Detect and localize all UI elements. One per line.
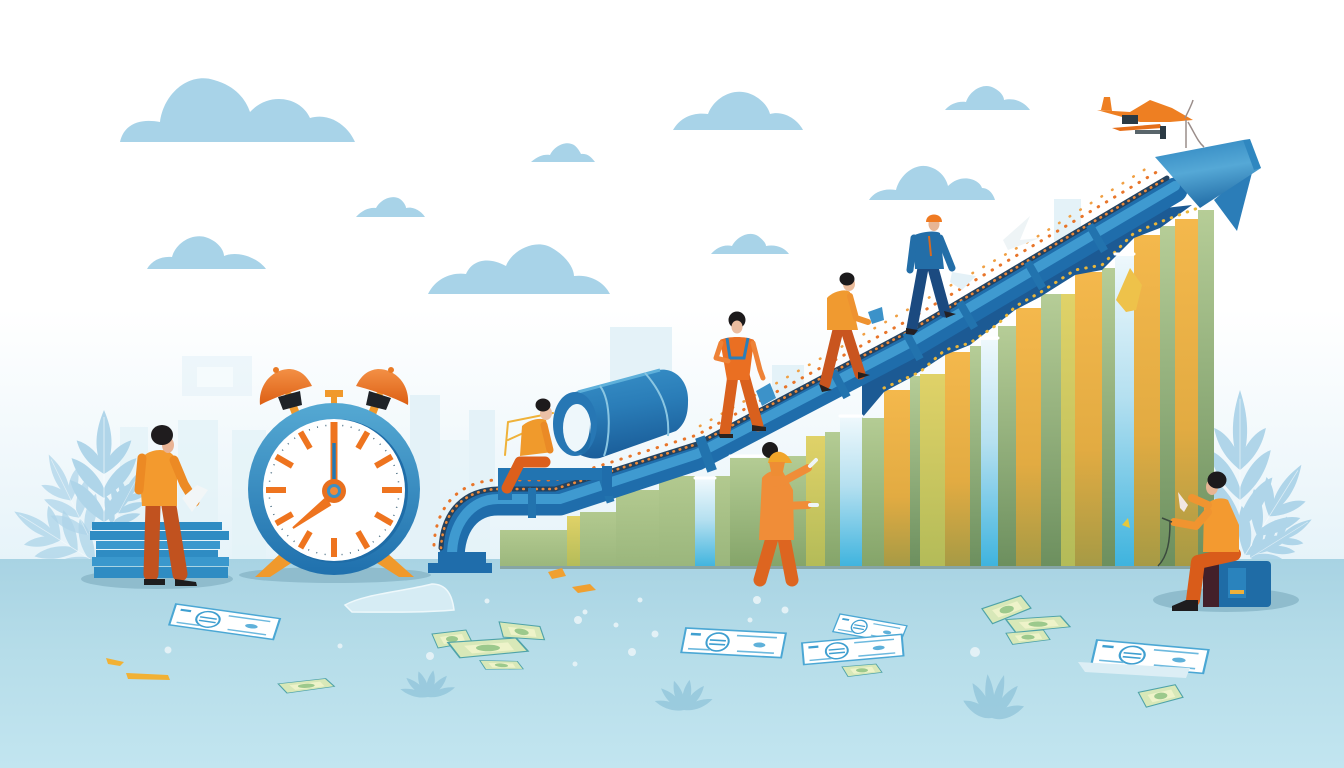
hour hand bbox=[293, 498, 330, 528]
person: worker in overalls with case bbox=[716, 312, 776, 438]
pipeline bbox=[428, 139, 1261, 573]
person: worker with tablet bbox=[819, 272, 884, 392]
money: blue bills on ground bbox=[169, 604, 1209, 678]
conveyor strip bbox=[441, 178, 1167, 548]
clock face bbox=[263, 419, 405, 561]
pipe body bbox=[452, 190, 1175, 560]
bell connectors bbox=[278, 391, 391, 410]
blue stacked panels bbox=[90, 522, 229, 578]
hour ticks bbox=[266, 432, 402, 557]
cloud 6 bbox=[147, 236, 266, 269]
cloud 2 bbox=[673, 92, 803, 130]
orange debris line 3 bbox=[700, 165, 1152, 426]
cloud 8 bbox=[711, 234, 789, 254]
alarm clock bbox=[239, 367, 431, 583]
plant: left fronds bbox=[0, 410, 158, 586]
lower conveyor frame bbox=[500, 478, 612, 490]
clock ring bbox=[248, 403, 420, 575]
background sky bbox=[0, 0, 1344, 562]
left bell bbox=[260, 369, 312, 405]
arrow fin bbox=[1214, 165, 1254, 231]
cloud 3 bbox=[531, 143, 595, 162]
drone plane bbox=[1097, 97, 1204, 148]
arrow cone bbox=[1155, 140, 1261, 208]
cloud 7 bbox=[428, 244, 610, 294]
torn white edge on bars bbox=[695, 254, 1134, 478]
cloud 1 bbox=[120, 78, 355, 142]
platform frame bbox=[498, 468, 610, 500]
person: seated worker on blue case bbox=[1153, 472, 1299, 612]
gold debris along bar tops bbox=[884, 208, 1198, 388]
orange and paper scraps bbox=[106, 216, 1142, 680]
orange debris line 2 bbox=[434, 170, 1160, 545]
clock centre bbox=[322, 479, 346, 503]
ground bbox=[0, 559, 1344, 768]
faded city skyline bbox=[120, 199, 1081, 562]
money: green bills on ground bbox=[278, 594, 1184, 708]
clock legs bbox=[255, 552, 414, 577]
plastic bag bbox=[345, 584, 454, 612]
flanges bbox=[528, 223, 1108, 518]
pipe underside shadow bbox=[862, 205, 1192, 418]
cloud 9 bbox=[869, 166, 995, 200]
pipe highlight bbox=[452, 186, 1175, 556]
orange debris line 1 bbox=[441, 178, 1167, 548]
plant: right fronds bbox=[1208, 390, 1326, 575]
cloud 4 bbox=[945, 86, 1030, 110]
minute hand bbox=[330, 422, 338, 484]
blue barrel bbox=[553, 370, 688, 458]
person: worker at barrel bbox=[507, 398, 553, 488]
cloud 5 bbox=[356, 197, 425, 217]
person: orange coat worker with yellow hat bbox=[759, 442, 817, 580]
bell stems bbox=[289, 396, 379, 414]
arrow rim bbox=[1243, 139, 1261, 170]
right bell bbox=[356, 369, 408, 405]
bar chart bbox=[500, 210, 1214, 569]
clouds bbox=[120, 78, 1030, 294]
top knob bbox=[325, 390, 343, 404]
person: blue suit engineer with hard hat bbox=[906, 214, 976, 335]
yellow railing bbox=[505, 413, 585, 455]
barrel platform and railing bbox=[498, 413, 612, 500]
person: left worker with paper bbox=[81, 425, 233, 589]
ground sprouts bbox=[399, 669, 1030, 727]
blue case bbox=[1203, 561, 1271, 607]
elbow base bbox=[428, 552, 492, 573]
